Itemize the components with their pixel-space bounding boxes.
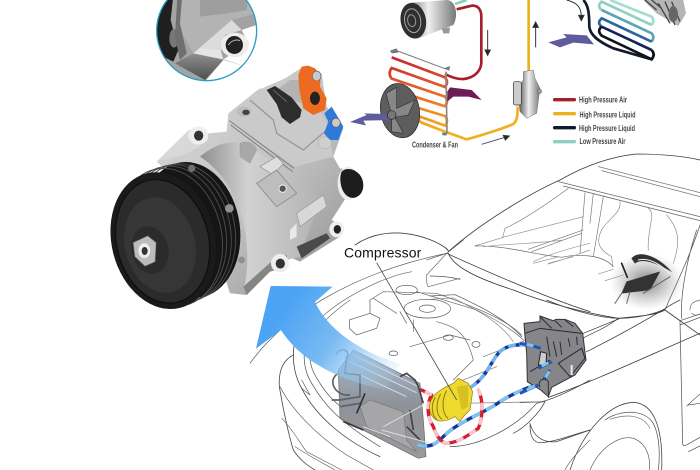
black electrical plug (267, 86, 302, 124)
condenser and fan label: Condenser & Fan (412, 140, 458, 150)
legend: high pressure air: High Pressure Air (579, 96, 627, 104)
yellow high pressure liquid line (445, 107, 518, 139)
legend (553, 96, 636, 146)
steering wheel and dashboard detail (610, 253, 683, 310)
condenser radiator in car (332, 350, 430, 458)
flow direction arrows (482, 0, 584, 144)
front fender, wheel arch and door lines (513, 300, 700, 470)
compressor label: Compressor (344, 244, 422, 260)
black low pressure liquid line (583, 0, 652, 59)
evaporator coil (599, 0, 654, 59)
blue service port (324, 107, 343, 140)
hub nut (133, 236, 156, 266)
orange service port (298, 66, 327, 115)
blower fan (643, 0, 686, 26)
compressor housing (157, 66, 363, 295)
purple airflow arrows (350, 34, 594, 125)
teal low pressure line (455, 0, 467, 4)
black side connector (338, 167, 363, 200)
car body outline: cabin and windshield (355, 154, 700, 342)
blue airflow arrow (256, 286, 400, 390)
legend: high pressure liquid black: High Pressure Liquid (579, 124, 635, 133)
mounting ears (188, 107, 344, 273)
fan (376, 80, 424, 141)
hose: return line (418, 383, 540, 446)
car line drawing (250, 154, 700, 470)
legend: high pressure liquid yellow: High Pressure Liquid (580, 110, 636, 120)
hood and engine bay lines (250, 240, 590, 470)
legend: low pressure air: Low Pressure Air (580, 137, 626, 146)
refrigerant circuit diagram (350, 0, 686, 144)
yellow compressor in car (377, 263, 473, 422)
front bumper lines (279, 340, 380, 470)
hose: high pressure lines (422, 390, 482, 443)
compressor product photo (96, 0, 363, 320)
refrigerant hoses in car (418, 345, 540, 446)
gas cylinder compressor (398, 0, 456, 41)
receiver drier (513, 70, 542, 118)
red high pressure air line (445, 6, 481, 79)
hose: low pressure to evaporator (472, 345, 540, 387)
black pulley (96, 155, 249, 320)
evaporator unit in car (520, 316, 586, 397)
condenser coil (390, 48, 450, 135)
inset zoom circle (157, 0, 260, 87)
